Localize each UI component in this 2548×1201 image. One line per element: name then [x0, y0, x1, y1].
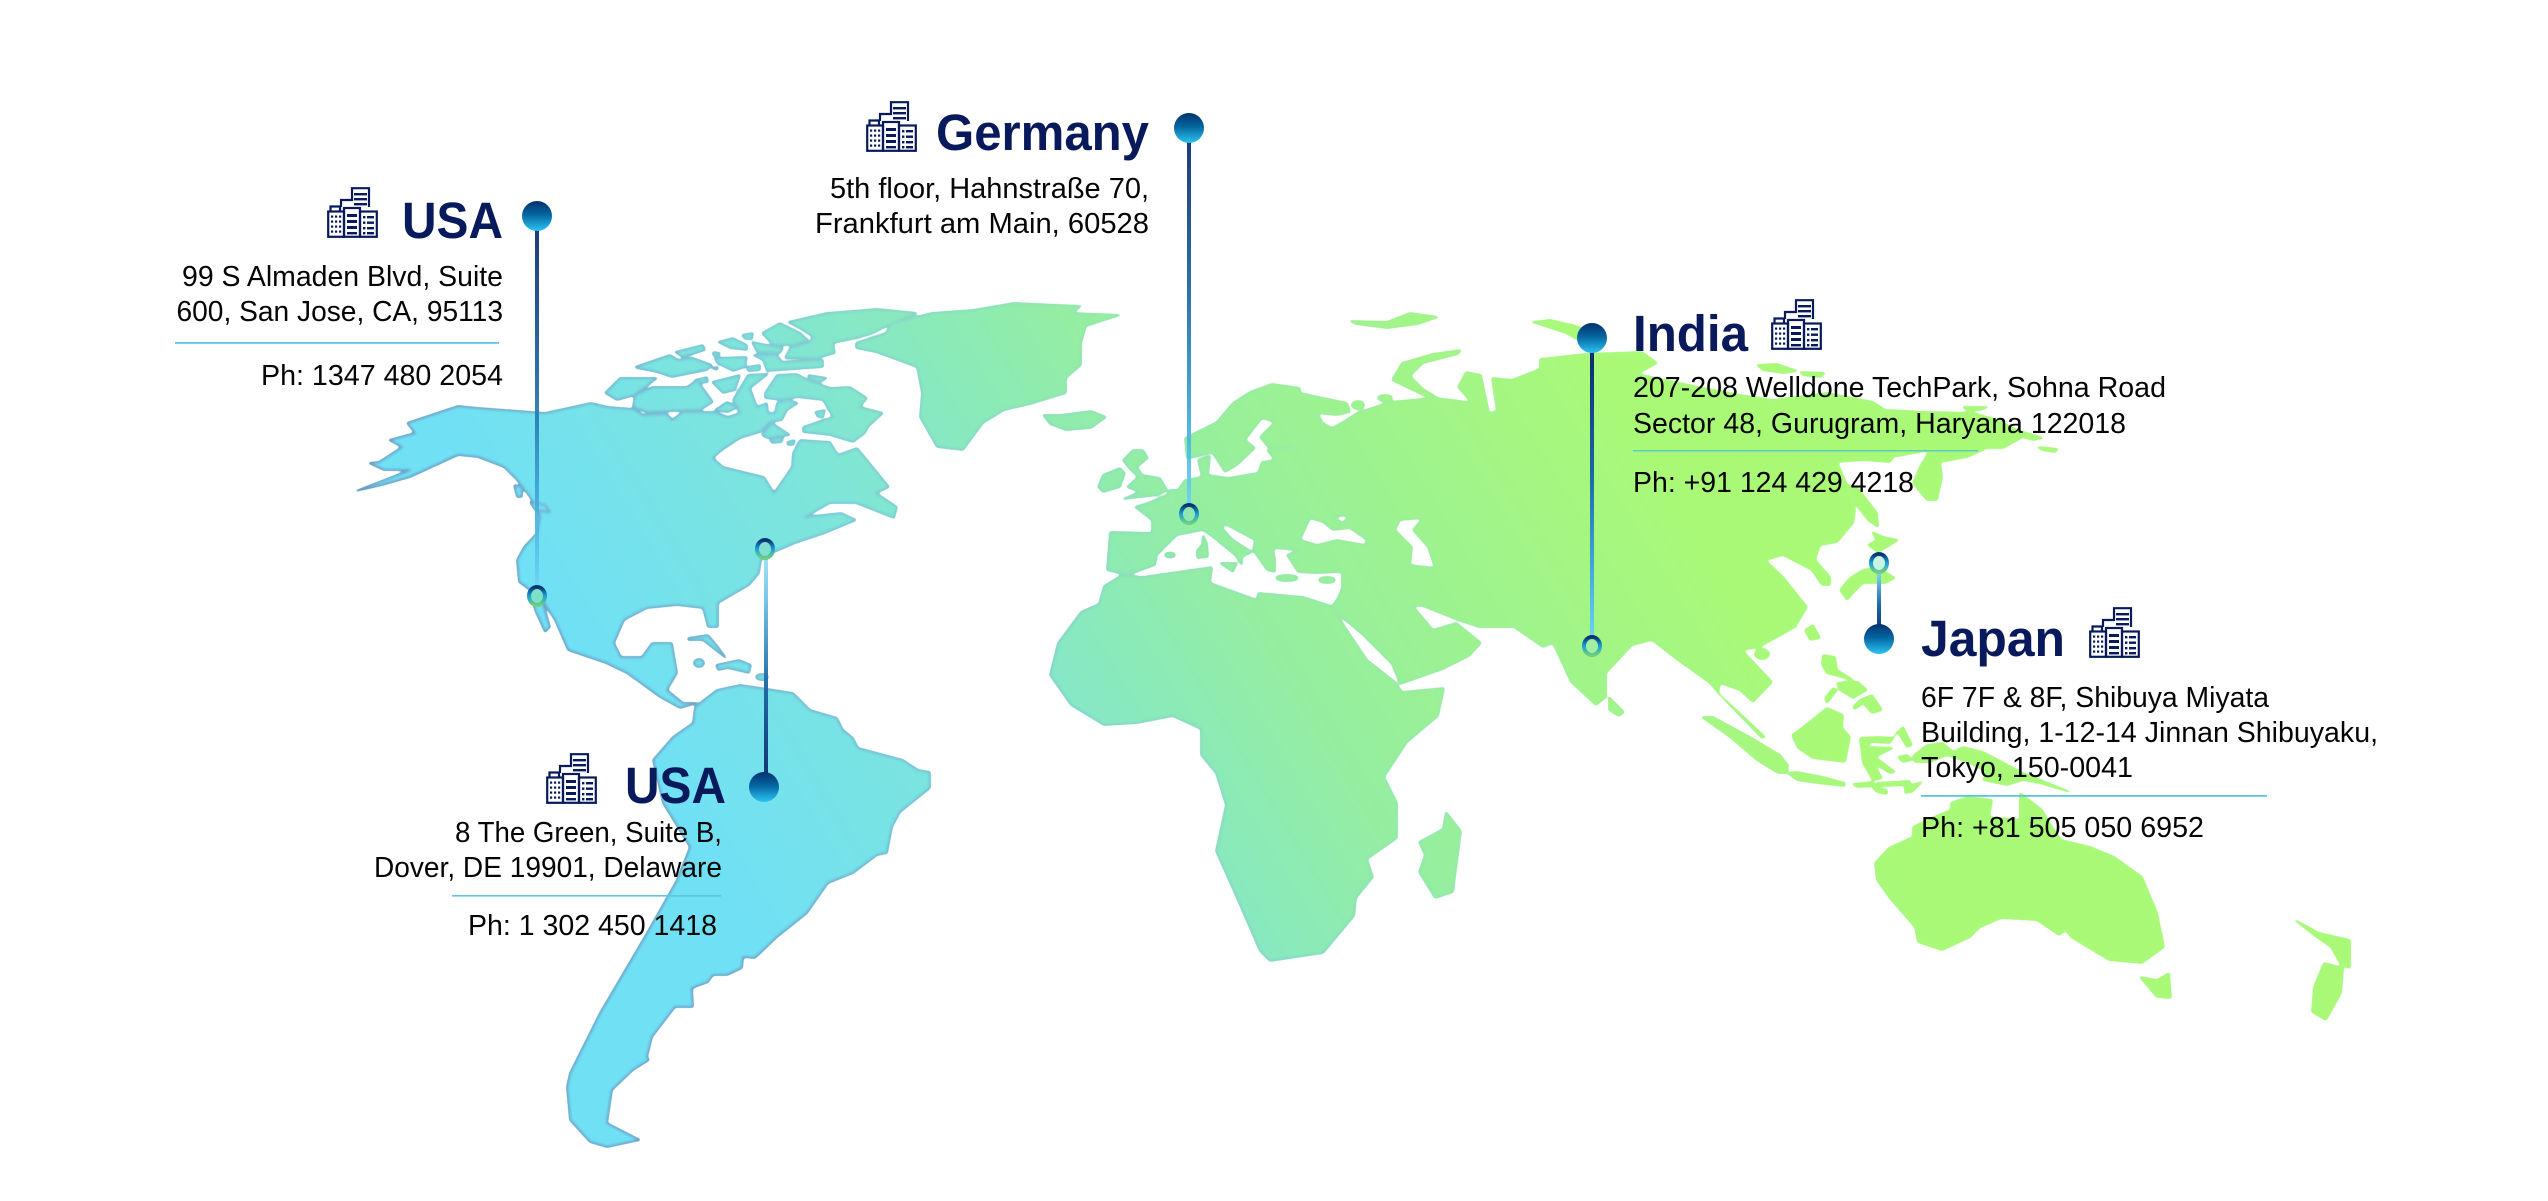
map marker: Tokyo [1871, 554, 1887, 572]
heading: India: India [1633, 305, 1749, 362]
canadian arctic islands and caribbean [514, 309, 917, 680]
madagascar [1419, 812, 1461, 898]
pin head: San Jose [522, 201, 552, 231]
heading: USA: USA [625, 757, 726, 814]
callout: USA San Jose [175, 188, 552, 605]
callout: Japan [1864, 554, 2378, 844]
address [176, 261, 503, 328]
pin line: Tokyo [1877, 563, 1881, 639]
address [374, 817, 722, 884]
icon: office buildings [1772, 300, 1821, 349]
address: Building, 1-12-14 Jinnan Shibuyaku, [1921, 717, 2378, 749]
address: 99 S Almaden Blvd, Suite [182, 261, 503, 293]
address: Tokyo, 150-0041 [1921, 752, 2133, 784]
phone: Ph: +81 505 050 6952 [1921, 812, 2204, 844]
greenland and iceland [856, 303, 1120, 450]
world map [356, 303, 2350, 1147]
africa [1050, 567, 1444, 961]
pin line: Dover [764, 550, 768, 787]
address: Sector 48, Gurugram, Haryana 122018 [1633, 408, 2126, 440]
address [815, 173, 1149, 240]
heading: USA: USA [402, 192, 503, 249]
icon: office buildings [2090, 608, 2139, 657]
phone: Ph: 1 302 450 1418 [468, 910, 717, 942]
tasmania and new zealand [2140, 920, 2350, 1020]
north america [356, 374, 897, 708]
icon: office buildings [867, 102, 916, 151]
pin head: Gurugram [1577, 323, 1607, 353]
pin head: Frankfurt [1174, 113, 1204, 143]
address: Dover, DE 19901, Delaware [374, 852, 722, 884]
address: 600, San Jose, CA, 95113 [176, 296, 503, 328]
address [1921, 682, 2378, 784]
address: 5th floor, Hahnstraße 70, [830, 173, 1149, 205]
heading: Germany: Germany [936, 104, 1150, 161]
pin line: Frankfurt [1187, 128, 1191, 514]
phone: Ph: +91 124 429 4218 [1633, 467, 1914, 499]
address: 8 The Green, Suite B, [455, 817, 722, 849]
southeast asia islands [1702, 655, 2070, 794]
phone: Ph: 1347 480 2054 [261, 360, 503, 392]
south america [567, 685, 930, 1147]
heading: Japan: Japan [1921, 610, 2065, 667]
pin line: Gurugram [1590, 338, 1594, 646]
icon: office buildings [547, 754, 596, 803]
pin head: Tokyo [1864, 624, 1894, 654]
map marker: Gurugram [1584, 637, 1600, 655]
map marker: Dover [757, 540, 773, 558]
pin head: Dover [749, 772, 779, 802]
map marker: Frankfurt [1181, 505, 1197, 523]
address: 6F 7F & 8F, Shibuya Miyata [1921, 682, 2269, 714]
europe and asia islands [1098, 313, 2058, 716]
address: Frankfurt am Main, 60528 [815, 208, 1149, 240]
callout: Germany [815, 102, 1204, 523]
australia [1875, 793, 2164, 963]
map marker: San Jose [529, 587, 545, 605]
eurasia [1107, 352, 2043, 738]
address [1633, 372, 2166, 440]
address: 207-208 Welldone TechPark, Sohna Road [1633, 372, 2166, 404]
callout: India [1577, 300, 2166, 655]
icon: office buildings [328, 188, 377, 237]
pin line: San Jose [535, 216, 539, 596]
callout: USA Dover [374, 540, 779, 942]
